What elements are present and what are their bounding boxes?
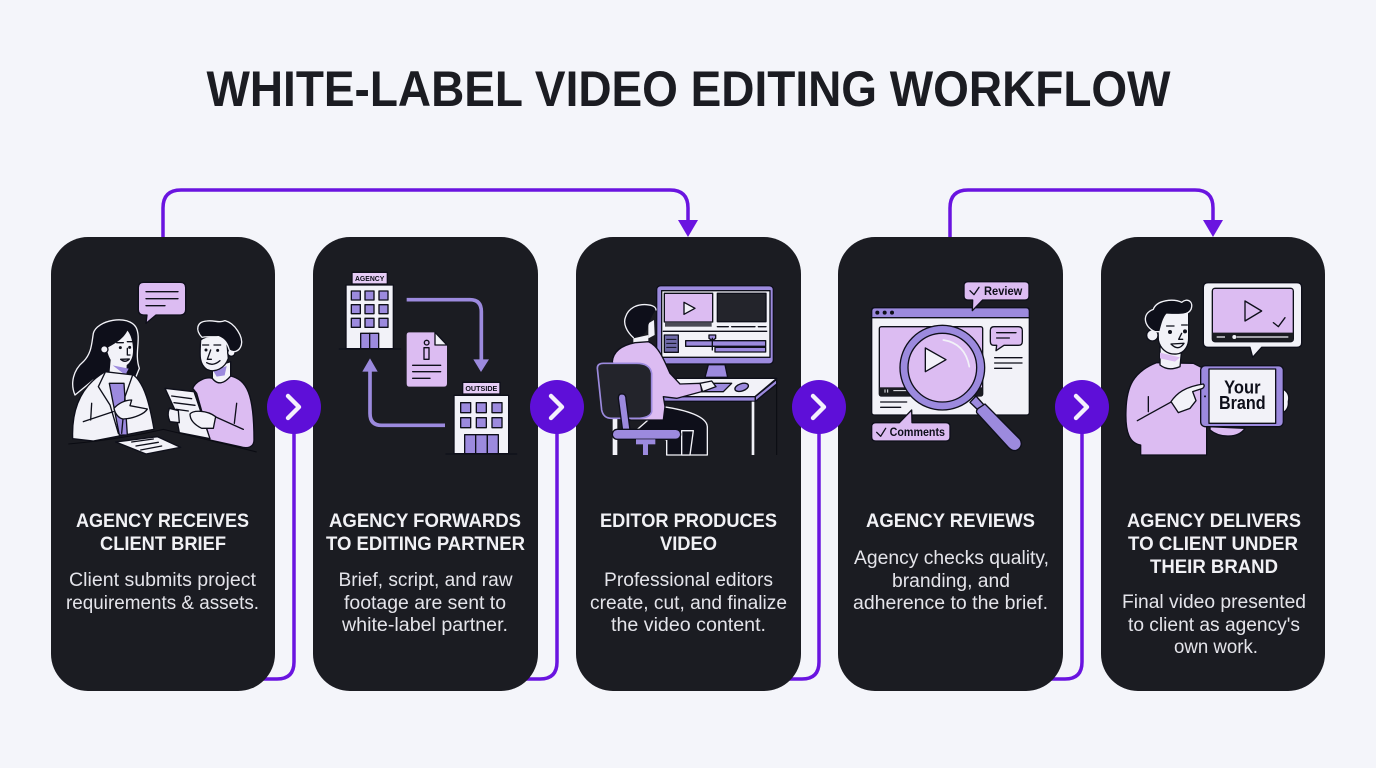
panel: step 2 [313,237,538,691]
icon: magnifier reviewing video [872,282,1029,451]
panel: step 1 [51,237,275,691]
panel: step 5: TO CLIENT UNDER [1128,533,1298,555]
panel: step 1: CLIENT BRIEF [100,533,226,555]
panel: step 2: white-label partner. [341,615,508,636]
panel: step 5: THEIR BRAND [1150,556,1278,578]
icon: buildings exchanging brief [339,272,517,454]
connector: step 4 to step 5 [1050,430,1082,679]
panel: step 2: TO EDITING PARTNER [326,533,525,555]
icon: person presenting branded tablet: Your [1224,376,1260,397]
description: Brief, script, and raw [338,570,513,591]
icon: buildings exchanging brief: AGENCY [355,274,384,283]
icon: person presenting branded tablet [1126,283,1302,455]
panel: step 5: own work. [1174,637,1258,658]
heading: AGENCY FORWARDS [329,510,521,532]
card background [313,237,538,691]
arrow: step 4 to step 5 [950,190,1223,238]
heading: AGENCY DELIVERS [1127,510,1301,532]
heading: AGENCY RECEIVES [76,510,249,532]
icon: next arrow 3 [792,380,846,434]
connector: step 3 to step 4 [787,430,819,679]
heading: EDITOR PRODUCES [600,510,777,532]
panel: step 4: adherence to the brief. [853,593,1048,614]
card background [838,237,1063,691]
panel: step 5 [1101,237,1325,691]
panel: step 4 [838,237,1063,691]
panel: step 2: footage are sent to [344,593,506,614]
description: Client submits project [69,570,257,591]
title: WHITE-LABEL VIDEO EDITING WORKFLOW [206,61,1171,117]
icon: magnifier reviewing video: Review [984,285,1023,298]
panel: step 4: branding, and [892,571,1010,592]
panel: step 5: to client as agency's [1128,615,1300,636]
description: Final video presented [1122,592,1306,613]
panel: step 3: VIDEO [660,533,717,555]
icon: next arrow 1 [267,380,321,434]
connector: step 1 to step 2 [262,430,294,679]
arrow: step 1 to step 3 [163,190,698,238]
connector: step 2 to step 3 [525,430,557,679]
panel: step 3: create, cut, and finalize [590,593,787,614]
card background [51,237,275,691]
card background [576,237,801,691]
icon: next arrow 4 [1055,380,1109,434]
icon: agency and client meeting [68,282,257,454]
panel: step 1: requirements & assets. [66,593,259,614]
card background [1101,237,1325,691]
icon: buildings exchanging brief: OUTSIDE [465,384,497,393]
panel: step 3 [576,237,801,691]
icon: person presenting branded tablet: Brand [1219,392,1266,413]
description: Professional editors [604,570,773,591]
icon: magnifier reviewing video: Comments [890,426,945,439]
icon: editor at desktop timeline [597,286,777,455]
icon: next arrow 2 [530,380,584,434]
description: Agency checks quality, [854,548,1049,569]
panel: step 3: the video content. [611,615,766,636]
heading: AGENCY REVIEWS [866,510,1035,532]
